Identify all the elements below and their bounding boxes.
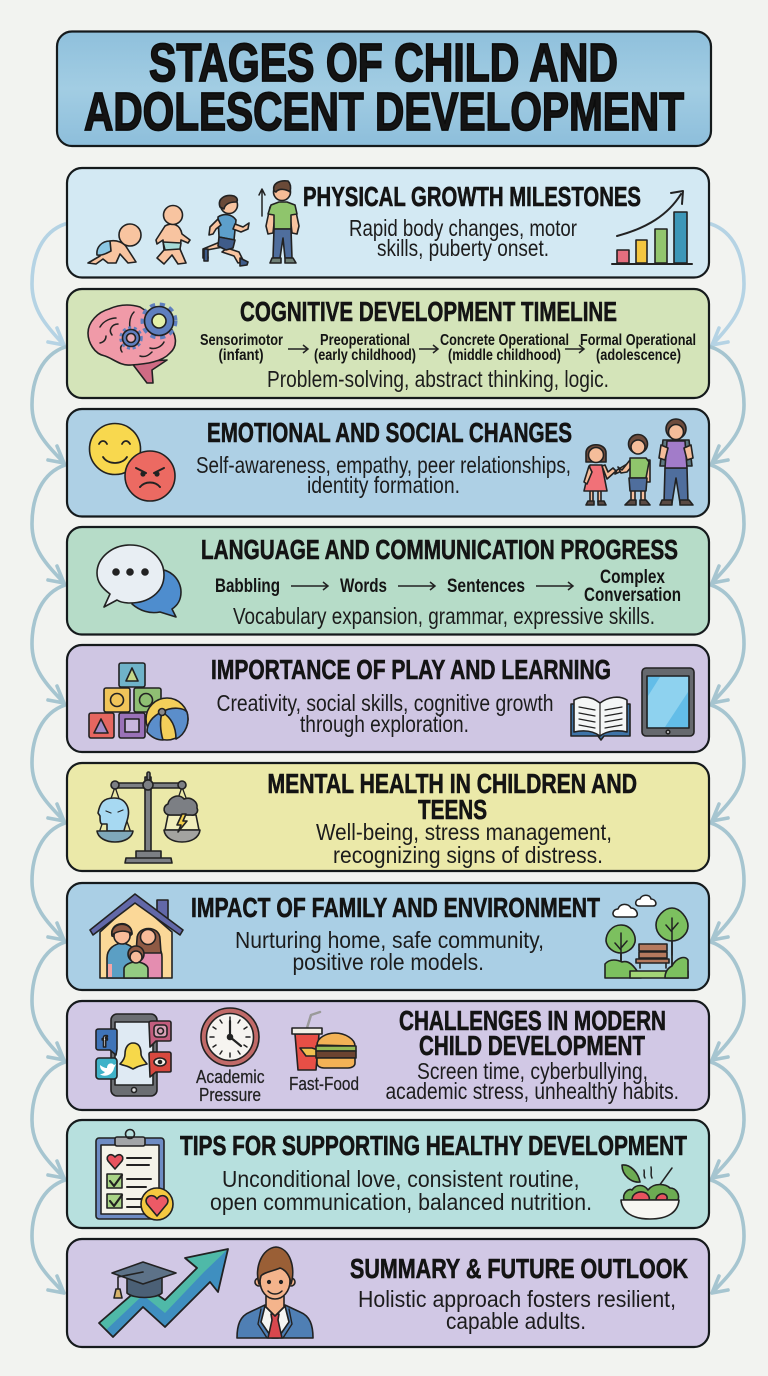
arrow: physical to cognitive (32, 224, 65, 345)
icon: clock (201, 1008, 259, 1066)
flow step: complex conversation (584, 566, 681, 606)
icon: tablet (642, 668, 694, 736)
panel: importance of play and learning (67, 645, 709, 752)
flow step: complex conversation: Conversation (584, 584, 681, 606)
arrow: cognitive to emotional (32, 347, 65, 463)
flow step: sentences: Sentences (447, 575, 525, 597)
panel: language and communication progress (67, 527, 709, 634)
panel: challenges in modern child development (67, 1001, 709, 1110)
label: academic pressure (196, 1066, 264, 1105)
panel: mental health in children and teens (67, 763, 709, 871)
timeline stage: sensorimotor: (infant) (218, 347, 264, 364)
arrow: physical to cognitive, right (711, 224, 744, 345)
icon: open book (571, 697, 630, 740)
panel: impact of family and environment (67, 883, 709, 990)
arrow: language to play, right (711, 585, 744, 703)
timeline stage: formal operational: (adolescence) (596, 347, 681, 364)
icon: toy blocks and beach ball (89, 663, 188, 740)
heading: PHYSICAL GROWTH MILESTONES (303, 181, 641, 212)
arrow (288, 345, 308, 353)
flow step: complex conversation: Complex (600, 566, 665, 588)
body text (196, 452, 571, 498)
arrow: play to mental health, right (711, 705, 744, 821)
timeline stage: preoperational: Preoperational (320, 332, 410, 349)
body text: recognizing signs of distress. (333, 842, 603, 868)
body text: through exploration. (300, 711, 469, 737)
timeline stage: preoperational (314, 332, 416, 364)
panel: cognitive development timeline (67, 289, 709, 398)
arrow: challenges to tips, right (711, 1062, 744, 1178)
icon: phone with social media: f (102, 1034, 108, 1051)
icon: growth stages from baby to teen (88, 181, 299, 266)
body text (349, 215, 577, 261)
body text: Screen time, cyberbullying, (417, 1058, 648, 1084)
label: academic pressure: Academic (196, 1066, 264, 1087)
heading: CHALLENGES IN MODERN (399, 1005, 666, 1036)
arrow: mental health to family (32, 823, 65, 940)
arrow: tips to summary (32, 1180, 65, 1293)
body text: open communication, balanced nutrition. (210, 1189, 592, 1215)
body text: Rapid body changes, motor (349, 215, 577, 241)
connector arrows: left side (32, 224, 65, 1293)
flow step: words: Words (340, 575, 387, 597)
arrow: language to play (32, 585, 65, 703)
body text: skills, puberty onset. (377, 235, 549, 261)
arrow: challenges to tips (32, 1062, 65, 1178)
timeline stage: formal operational: Formal Operational (580, 332, 696, 349)
heading: COGNITIVE DEVELOPMENT TIMELINE (240, 296, 617, 327)
icon: family in a house (90, 894, 183, 978)
heading: IMPACT OF FAMILY AND ENVIRONMENT (191, 892, 600, 923)
body text: positive role models. (292, 949, 484, 975)
body text: Problem-solving, abstract thinking, logic. (267, 366, 609, 392)
icon: clipboard checklist with heart badge (96, 1130, 173, 1220)
body text (316, 819, 612, 868)
arrow: emotional to language (32, 465, 65, 583)
heading (399, 1005, 666, 1061)
label: fast-food: Fast-Food (289, 1073, 359, 1094)
body text (210, 1166, 592, 1215)
panel: emotional and social changes (67, 409, 709, 516)
icon: brain with gears (88, 305, 175, 383)
arrow (565, 345, 584, 353)
timeline stage: sensorimotor: Sensorimotor (200, 332, 283, 349)
arrow: mental health to family, right (711, 823, 744, 940)
timeline stage: formal operational (580, 332, 696, 364)
body text: Creativity, social skills, cognitive growth (216, 690, 554, 716)
icon: young professional in a suit (237, 1247, 313, 1338)
arrow (291, 582, 328, 590)
icon: phone with social media (96, 1014, 171, 1096)
arrow: play to mental health (32, 705, 65, 821)
arrow: family to challenges, right (711, 942, 744, 1060)
arrow: tips to summary, right (711, 1180, 744, 1293)
panel: summary and future outlook (67, 1239, 709, 1347)
body text (358, 1286, 676, 1334)
heading: TEENS (418, 794, 487, 825)
icon: three children holding hands (584, 419, 693, 505)
title text (84, 33, 684, 142)
arrow: emotional to language, right (711, 465, 744, 583)
timeline stage: concrete operational: (middle childhood) (448, 347, 561, 364)
body text: Holistic approach fosters resilient, (358, 1286, 676, 1312)
body text: Unconditional love, consistent routine, (222, 1166, 580, 1192)
panel: tips for supporting healthy development (67, 1120, 709, 1228)
body text: Self-awareness, empathy, peer relationships, (196, 452, 571, 478)
arrow (419, 345, 438, 353)
heading (268, 768, 637, 825)
body text: Vocabulary expansion, grammar, expressive skills. (233, 603, 655, 629)
body text: identity formation. (307, 472, 460, 498)
timeline stage: concrete operational: Concrete Operational (440, 332, 569, 349)
timeline stage: preoperational: (early childhood) (314, 347, 416, 364)
icon: park with trees, bench and clouds (605, 895, 688, 978)
title banner (57, 32, 711, 146)
body text (216, 690, 554, 737)
arrow (536, 582, 573, 590)
body text: Well-being, stress management, (316, 819, 612, 845)
icon: salad bowl with leaf (621, 1165, 679, 1219)
heading: EMOTIONAL AND SOCIAL CHANGES (207, 417, 572, 448)
icon: fast food drink and burger (292, 1012, 356, 1070)
body text: Nurturing home, safe community, (235, 927, 544, 953)
flow step: babbling: Babbling (215, 575, 280, 597)
icon: rising bar chart with arrow (612, 191, 692, 264)
heading: MENTAL HEALTH IN CHILDREN AND (268, 768, 637, 799)
body text: academic stress, unhealthy habits. (386, 1078, 679, 1104)
arrow (398, 582, 435, 590)
icon: speech bubbles (97, 545, 181, 617)
arrow: cognitive to emotional, right (711, 347, 744, 463)
body text (386, 1058, 679, 1104)
icon: rising arrow with graduation cap (99, 1249, 228, 1337)
icon: happy and angry faces (90, 424, 175, 501)
body text: capable adults. (446, 1308, 586, 1334)
heading: CHILD DEVELOPMENT (419, 1030, 645, 1061)
timeline stage: concrete operational (440, 332, 569, 364)
icon: balance scale with calm head and storm cloud (97, 772, 200, 863)
timeline stage: sensorimotor (200, 332, 283, 364)
label: academic pressure: Pressure (199, 1084, 261, 1105)
arrow: family to challenges (32, 942, 65, 1060)
body text (235, 927, 544, 975)
connector arrows: right side (711, 224, 744, 1293)
heading: IMPORTANCE OF PLAY AND LEARNING (211, 654, 611, 685)
title text: STAGES OF CHILD AND (149, 33, 618, 93)
panel: physical growth milestones (67, 168, 709, 278)
